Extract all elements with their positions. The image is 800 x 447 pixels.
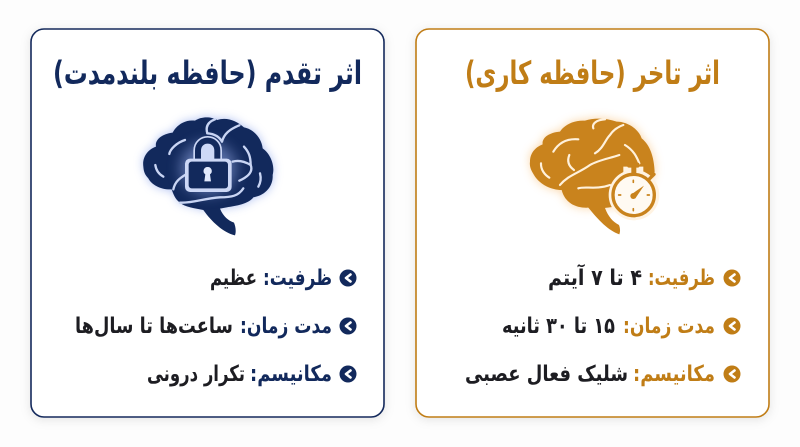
list row: duration: ۱۵ تا ۳۰ ثانیه bbox=[502, 314, 615, 339]
list row: mechanism: شلیک فعال عصبی bbox=[465, 362, 628, 387]
heading: long-term memory: اثر تقدم (حافظه بلندمدت) bbox=[53, 54, 362, 92]
list row: mechanism bbox=[147, 362, 356, 387]
list row: duration: مدت زمان: bbox=[623, 314, 715, 339]
list row: capacity: عظیم bbox=[210, 266, 257, 291]
list row: capacity bbox=[210, 266, 356, 291]
list row: duration bbox=[75, 314, 356, 339]
list row: capacity: ظرفیت: bbox=[648, 266, 715, 291]
sub-icon: stopwatch bbox=[609, 163, 659, 220]
panel: long-term memory bbox=[31, 29, 384, 417]
icon: brain with padlock bbox=[143, 117, 273, 235]
sub-icon: padlock bbox=[185, 141, 232, 192]
icon: brain with stopwatch bbox=[530, 119, 659, 234]
list row: mechanism: مکانیسم: bbox=[633, 362, 715, 387]
list row: duration: مدت زمان: bbox=[240, 314, 332, 339]
panel: working memory bbox=[416, 29, 769, 417]
list row: duration bbox=[502, 314, 740, 339]
list row: duration: ساعت‌ها تا سال‌ها bbox=[75, 314, 233, 339]
list row: capacity: ظرفیت: bbox=[263, 266, 332, 291]
list row: capacity bbox=[548, 263, 740, 291]
list row: mechanism: مکانیسم: bbox=[250, 362, 332, 387]
list row: capacity: ۴ تا ۷ آیتم bbox=[548, 263, 642, 291]
list row: mechanism: تکرار درونی bbox=[147, 362, 245, 387]
